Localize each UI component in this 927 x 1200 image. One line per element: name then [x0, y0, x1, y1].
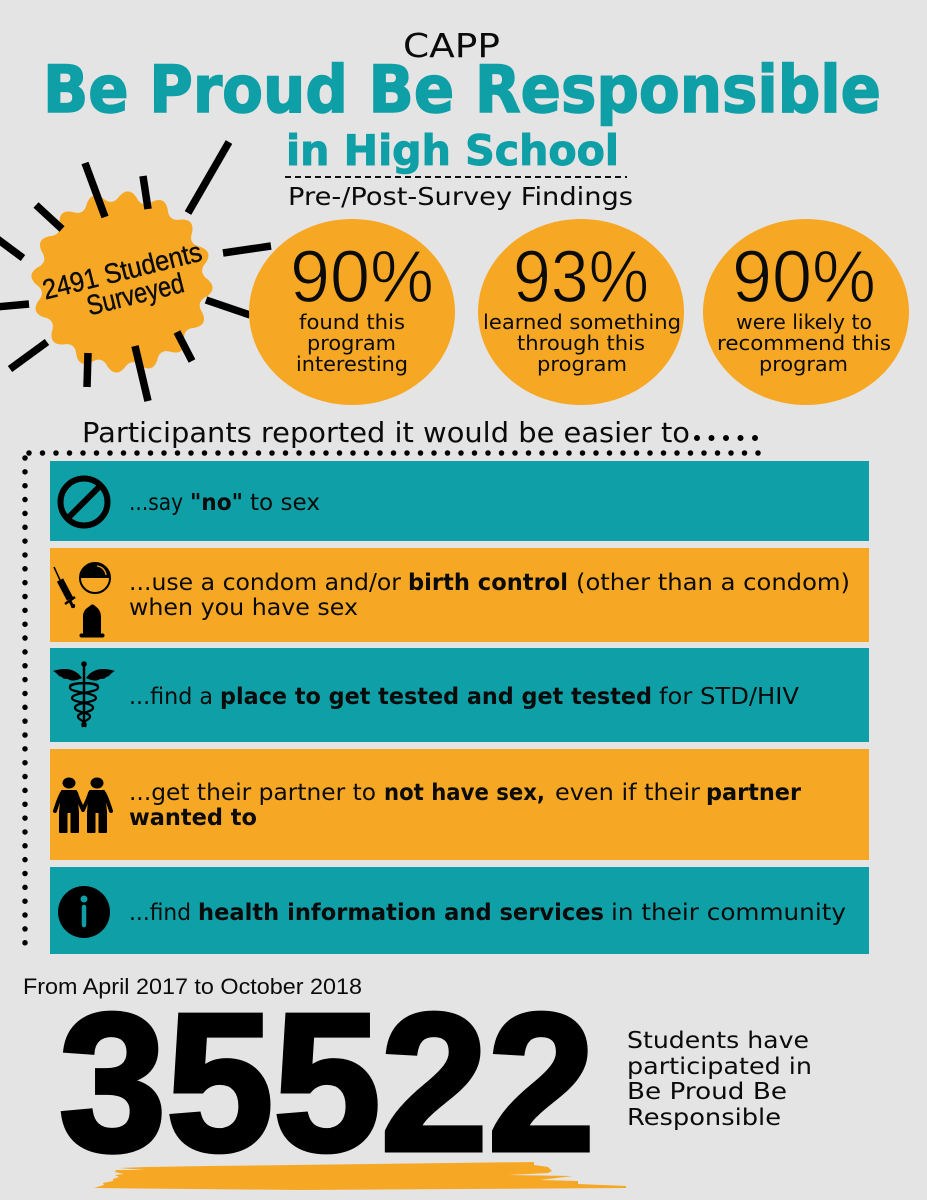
row text [129, 570, 850, 621]
icon: prohibition sign [60, 478, 108, 526]
stat circle: 90% recommend: program [759, 352, 848, 376]
stat circle: 93% learned: learned something [483, 310, 681, 334]
row text: even if their [555, 780, 701, 806]
stat circle: 90% interesting: 90% [290, 235, 434, 318]
stat circle: 93% learned: through this [517, 331, 645, 355]
row text: ...find a [129, 684, 213, 710]
badge text [39, 236, 211, 331]
row text: (other than a condom) [576, 570, 850, 596]
row text: not have sex, [384, 780, 545, 806]
row text: health information and services [198, 900, 604, 926]
row text: "no" [190, 490, 243, 516]
icon: couple holding hands [55, 778, 111, 832]
side text: students have participated: Students have [627, 1028, 809, 1054]
stat circle: 90% interesting: interesting [296, 352, 408, 376]
row text [129, 900, 846, 926]
icon: condom [80, 604, 104, 638]
scalloped badge shape [25, 185, 219, 379]
row: get tested [50, 648, 869, 742]
row text: for STD/HIV [659, 684, 799, 710]
stat circle: 90% interesting: found this [299, 310, 405, 334]
row text: ...use a condom and/or [129, 570, 402, 596]
icon: caduceus [53, 661, 115, 727]
stat circle: 90% recommend: 90% [732, 235, 876, 318]
row text: in their community [611, 900, 846, 926]
stat circle: 90% recommend: were likely to [736, 310, 872, 334]
row text: birth control [408, 570, 568, 596]
side text: students have participated: Be Proud Be [627, 1079, 787, 1105]
badge text: Surveyed [83, 267, 187, 321]
paint swoosh underline [94, 1162, 626, 1190]
icon: pill [80, 563, 110, 593]
stat circle: 90% recommend [703, 219, 909, 405]
title block [43, 26, 881, 211]
row text: ...say [129, 490, 183, 516]
row text [129, 780, 802, 831]
row text: place to get tested and get tested [220, 684, 652, 710]
row: condom and birth control [50, 548, 869, 642]
stat circle: 90% recommend: recommend this [717, 331, 891, 355]
heading: CAPP: CAPP [403, 26, 500, 65]
stat circle: 93% learned [478, 219, 684, 405]
row text [129, 490, 320, 516]
subheading: survey findings: Pre-/Post-Survey Findings [288, 182, 633, 211]
badge text: 2491 Students [39, 236, 205, 305]
heading: in High School: in High School [286, 126, 619, 175]
row text: ...find [129, 900, 191, 926]
row text: ...get their partner to [129, 780, 376, 806]
stat circle: 93% learned: 93% [513, 235, 649, 318]
side text: students have participated [627, 1028, 812, 1131]
row text [129, 684, 799, 710]
row text: to sex [250, 490, 320, 516]
row: say no [50, 461, 869, 541]
side text: students have participated: Responsible [627, 1105, 781, 1131]
row text: when you have sex [129, 595, 358, 621]
big number: 35522: 35522 [59, 973, 595, 1192]
side text: students have participated: participated in [627, 1054, 812, 1080]
stat circle: 90% interesting: program [307, 331, 396, 355]
row: partner not have sex [50, 749, 869, 860]
icon: information [58, 886, 110, 938]
starburst badge: students surveyed [0, 142, 271, 401]
date range label: From April 2017 to October 2018 [23, 974, 362, 999]
stat circle: 90% interesting [249, 219, 455, 405]
row text: wanted to [129, 805, 257, 831]
stat circle: 93% learned: program [537, 352, 627, 376]
icon: syringe [54, 567, 75, 608]
burst rays [0, 142, 271, 401]
row text: partner [706, 780, 802, 806]
row: health information [50, 867, 869, 954]
section heading: participants reported: Participants reported it would be easier to [82, 416, 690, 449]
